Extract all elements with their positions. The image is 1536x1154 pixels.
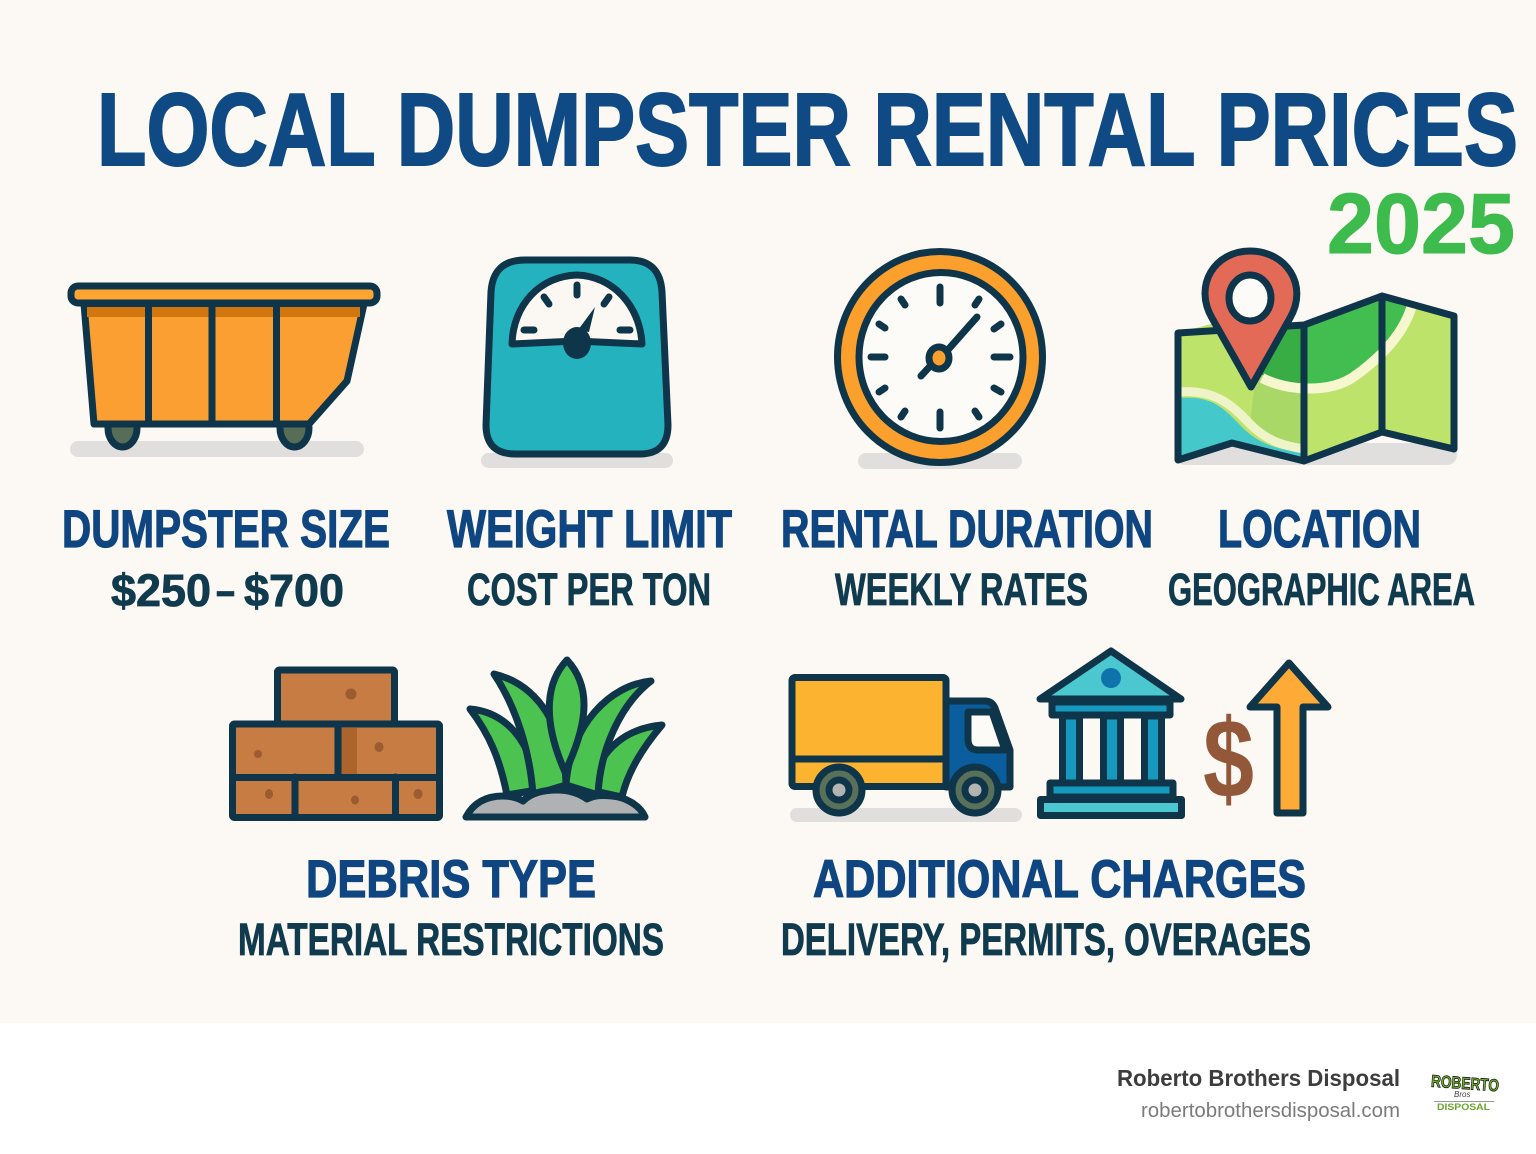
price range: – bbox=[216, 565, 235, 616]
price range: $700 bbox=[244, 565, 344, 616]
icon: delivery truck bbox=[790, 678, 1022, 822]
year: 2025 bbox=[1327, 177, 1515, 272]
icon: map with pin bbox=[1175, 251, 1457, 465]
footer company name: Roberto Brothers Disposal bbox=[1117, 1065, 1400, 1091]
footer band bbox=[0, 1023, 1536, 1154]
icon: dollar sign: $ bbox=[1203, 696, 1254, 821]
label: additional charges: ADDITIONAL CHARGES bbox=[813, 850, 1306, 909]
icon: bricks bbox=[232, 670, 440, 818]
label: dumpster size: DUMPSTER SIZE bbox=[62, 500, 390, 559]
label: location bbox=[1168, 500, 1475, 615]
label: rental duration: RENTAL DURATION bbox=[781, 500, 1153, 559]
label: weight limit: WEIGHT LIMIT bbox=[447, 500, 732, 559]
footer website: robertobrothersdisposal.com bbox=[1141, 1100, 1400, 1122]
icon: grass on dirt bbox=[466, 660, 662, 817]
icon: dumpster bbox=[70, 286, 377, 457]
cost per ton: COST PER TON bbox=[467, 564, 711, 615]
price range: $250 bbox=[111, 565, 211, 616]
label: rental duration bbox=[781, 500, 1153, 615]
label: location: LOCATION bbox=[1218, 500, 1421, 559]
logo: ROBERTO bbox=[1430, 1072, 1500, 1095]
icon: weight scale bbox=[481, 260, 673, 468]
label: weight limit bbox=[447, 500, 732, 615]
logo bbox=[1430, 1072, 1500, 1112]
price range bbox=[111, 565, 344, 616]
logo: DISPOSAL bbox=[1437, 1102, 1491, 1112]
icon: clock bbox=[838, 252, 1042, 469]
label: debris type: DEBRIS TYPE bbox=[306, 850, 596, 909]
weekly rates: WEEKLY RATES bbox=[835, 564, 1088, 615]
icon: government building bbox=[1040, 651, 1182, 816]
label: additional charges bbox=[781, 850, 1311, 965]
material restrictions: MATERIAL RESTRICTIONS bbox=[238, 914, 664, 965]
icon: up arrow bbox=[1250, 663, 1328, 813]
delivery, permits, overages: DELIVERY, PERMITS, OVERAGES bbox=[781, 914, 1311, 965]
label: debris type bbox=[238, 850, 664, 965]
label: dumpster size bbox=[62, 500, 390, 616]
logo: Bros bbox=[1454, 1090, 1470, 1099]
